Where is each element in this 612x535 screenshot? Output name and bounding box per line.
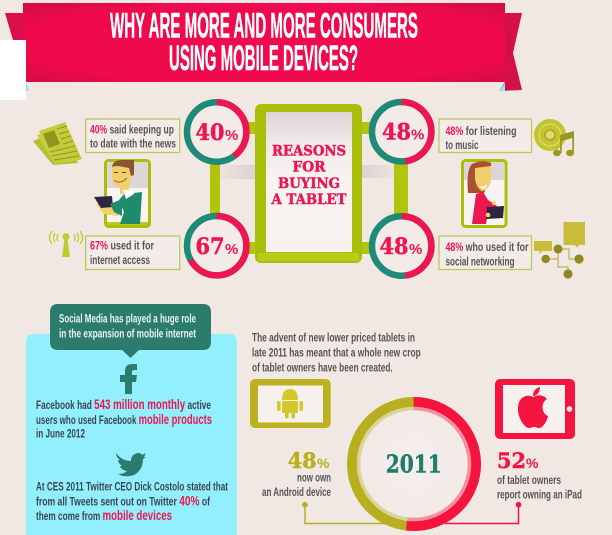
callout: music: 48% for listening bbox=[446, 126, 516, 138]
tablet bbox=[255, 104, 362, 263]
text block: new tablet owners: of tablet owners have been created. bbox=[252, 363, 393, 375]
ring: 48% music: % bbox=[411, 126, 424, 144]
callout: social networking bbox=[439, 236, 532, 270]
callout: music bbox=[439, 119, 532, 152]
connector: android bbox=[302, 502, 385, 524]
icon: newspaper bbox=[33, 122, 82, 165]
stat: android 48%: now own bbox=[297, 473, 331, 485]
title bbox=[110, 6, 418, 78]
ring: 67% bbox=[187, 216, 246, 275]
icon: social network bbox=[534, 222, 585, 279]
title: USING MOBILE DEVICES? bbox=[169, 39, 358, 78]
header ribbon bbox=[5, 3, 522, 91]
text block: new tablet owners bbox=[252, 333, 421, 375]
callout: internet: 67% used it for bbox=[90, 240, 154, 252]
callout: internet bbox=[86, 236, 180, 270]
chart: 2011 ring bbox=[352, 402, 476, 526]
ring: 40% bbox=[187, 102, 246, 162]
callout: news bbox=[86, 119, 180, 152]
stat: ipad 52%: of tablet owners bbox=[497, 475, 561, 487]
callout: music: to music bbox=[446, 140, 479, 152]
white corner block bbox=[0, 40, 26, 100]
twitter text bbox=[36, 482, 228, 523]
callout: social networking: social networking bbox=[446, 256, 514, 268]
ring: 67%: % bbox=[225, 241, 238, 258]
stat: android 48%: % bbox=[317, 455, 330, 471]
ring: 48% music bbox=[372, 102, 431, 161]
twitter text: At CES 2011 Twitter CEO Dick Costolo stated that bbox=[36, 482, 228, 494]
tablet heading: A TABLET bbox=[271, 192, 347, 208]
twitter text: them come from mobile devices bbox=[36, 508, 172, 523]
ring: 40%: % bbox=[225, 127, 238, 144]
icon: android robot bbox=[277, 389, 303, 418]
tablet heading bbox=[271, 144, 347, 208]
ring: 48% social: 48 bbox=[380, 234, 408, 260]
stat: ipad 52% bbox=[497, 448, 582, 502]
ring: 48% music: 48 bbox=[382, 120, 411, 146]
icon: apple logo bbox=[518, 387, 548, 428]
tablet heading: REASONS bbox=[272, 144, 346, 160]
ring: 48% social bbox=[372, 216, 431, 276]
stat: android 48% bbox=[262, 448, 331, 499]
icon: cd and music note bbox=[534, 119, 574, 156]
text block: new tablet owners: late 2011 has meant that a whole new crop bbox=[252, 348, 421, 360]
stat: android 48%: an Android device bbox=[262, 487, 331, 499]
ring: 40%: 40 bbox=[196, 120, 224, 146]
facebook text: Facebook had 543 million monthly active bbox=[36, 397, 211, 412]
icon: facebook bbox=[120, 364, 137, 394]
facebook text: in June 2012 bbox=[36, 428, 85, 440]
icon: android tablet bbox=[250, 379, 331, 428]
callout: internet: internet access bbox=[90, 255, 150, 267]
ring: 48% social: % bbox=[409, 241, 422, 258]
icon: wifi antenna bbox=[50, 231, 82, 257]
panel: reasons for buying a tablet bbox=[187, 102, 431, 276]
icon: man with tablet bbox=[94, 160, 150, 226]
social media callout: in the expansion of mobile internet bbox=[59, 328, 196, 340]
text block: new tablet owners: The advent of new lower priced tablets in bbox=[252, 333, 415, 345]
icon: apple tablet bbox=[495, 379, 575, 439]
stat: ipad 52%: 52 bbox=[497, 448, 526, 473]
tablet heading: FOR bbox=[292, 160, 326, 176]
tablet heading: BUYING bbox=[278, 176, 340, 192]
twitter text: from all Tweets sent out on Twitter 40% of bbox=[36, 494, 210, 509]
ring: 67%: 67 bbox=[196, 234, 224, 260]
callout: social networking: 48% who used it for bbox=[446, 242, 529, 254]
stat: android 48%: 48 bbox=[288, 448, 317, 473]
facebook text bbox=[36, 397, 212, 440]
connector: ipad bbox=[445, 502, 521, 524]
callout: news: 40% said keeping up bbox=[90, 124, 174, 136]
social media callout: Social Media has played a huge role bbox=[59, 314, 196, 326]
facebook text: users who used Facebook mobile products bbox=[36, 412, 212, 427]
icon: twitter bird bbox=[116, 453, 146, 476]
social media callout bbox=[50, 304, 211, 358]
panel: social media bbox=[26, 304, 237, 535]
chart: 2011 ring: 2011 bbox=[386, 450, 442, 479]
connector bars bbox=[210, 122, 408, 254]
callout: news: to date with the news bbox=[90, 138, 176, 150]
stat: ipad 52%: % bbox=[526, 455, 539, 471]
icon: woman with tablet bbox=[462, 160, 506, 226]
